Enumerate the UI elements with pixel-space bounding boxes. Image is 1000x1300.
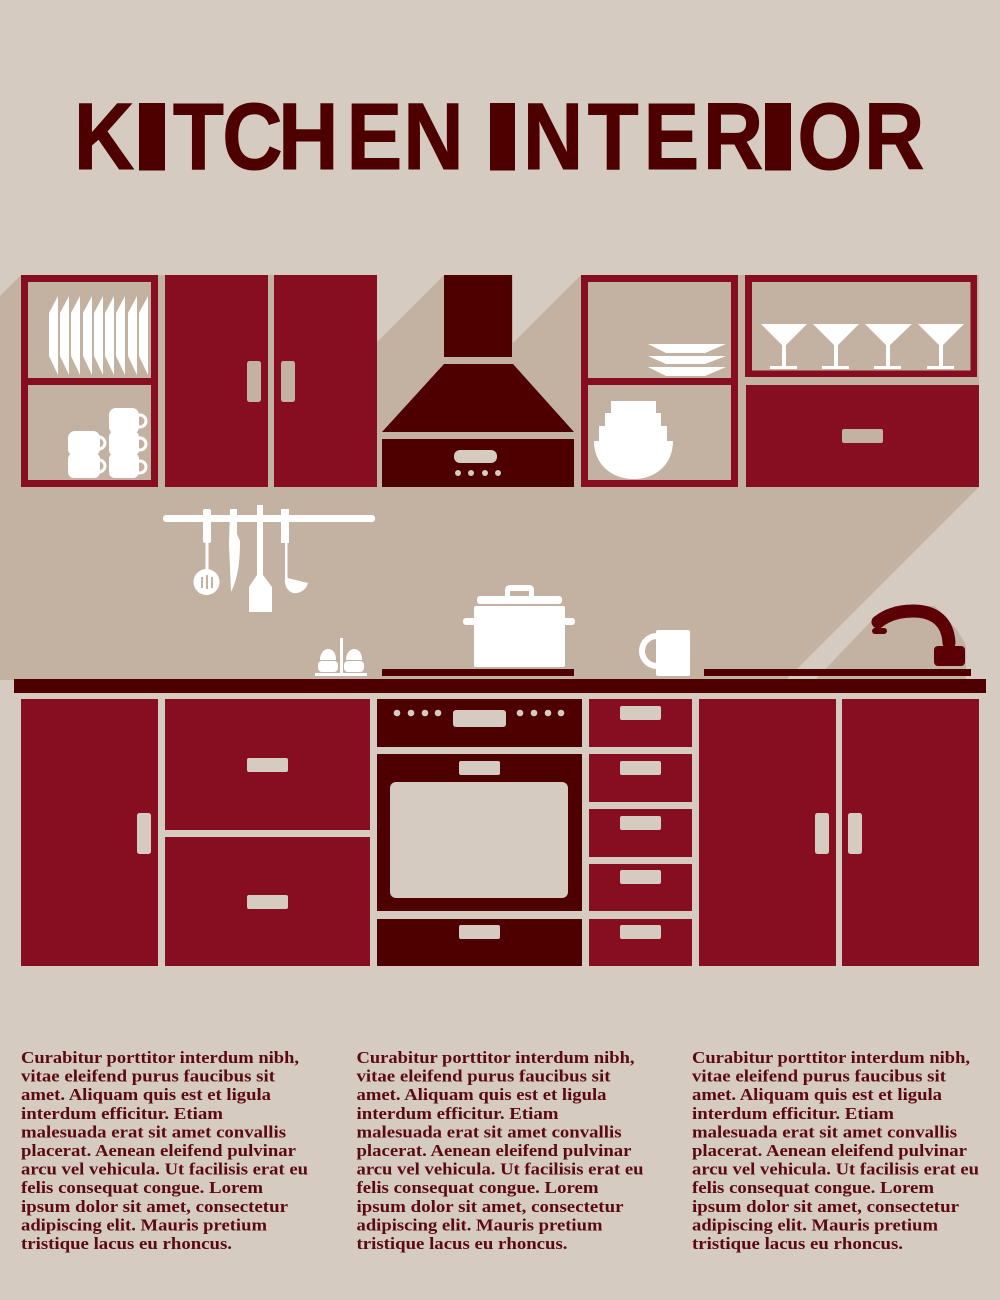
text block: middle column: placerat. Aenean eleifend pulvinar: [356, 1141, 632, 1160]
oven door: [377, 754, 582, 911]
long diagonal wall shadow: [0, 275, 979, 680]
text block: middle column: [356, 1048, 644, 1253]
text block: right column: amet. Aliquam quis est et ligula: [692, 1085, 943, 1104]
text block: middle column: adipiscing elit. Mauris pretium: [356, 1215, 602, 1234]
text block: right column: malesuada erat sit amet convallis: [692, 1122, 957, 1141]
text block: left column: amet. Aliquam quis est et ligula: [21, 1085, 272, 1104]
countertop: [14, 679, 986, 693]
text block: right column: tristique lacus eu rhoncus.: [692, 1234, 903, 1253]
text block: middle column: malesuada erat sit amet convallis: [356, 1122, 622, 1141]
cabinet: double doors: [165, 275, 377, 487]
title: KITCHENINTERIOR: [74, 83, 924, 189]
text block: left column: arcu vel vehicula. Ut facilisis erat eu: [21, 1160, 308, 1179]
icon: upright plates: [49, 296, 148, 375]
icon: stacked cups: [68, 408, 146, 478]
sink: [704, 669, 971, 676]
text block: right column: ipsum dolor sit amet, consectetur: [692, 1197, 959, 1216]
icon: skimmer: [194, 509, 220, 595]
oven bottom drawer: [377, 919, 582, 966]
icon: knife: [229, 509, 240, 592]
text block: left column: ipsum dolor sit amet, consectetur: [21, 1197, 288, 1216]
utensil rail: [163, 505, 375, 612]
text block: right column: arcu vel vehicula. Ut facilisis erat eu: [692, 1160, 979, 1179]
icon: cocktail glasses: [761, 324, 964, 369]
text block: right column: [692, 1048, 979, 1253]
text block: left column: [21, 1048, 308, 1253]
cabinet: five small drawers: [589, 699, 692, 966]
text block: right column: Curabitur porttitor interdum nibh,: [692, 1048, 970, 1067]
icon: cooking pot: [463, 585, 575, 667]
cabinet: two large drawers: [165, 699, 370, 966]
text block: right column: felis consequat congue. Lorem: [692, 1178, 934, 1197]
text block: right column: interdum efficitur. Etiam: [692, 1104, 894, 1123]
text block: left column: placerat. Aenean eleifend pulvinar: [21, 1141, 296, 1160]
text block: middle column: amet. Aliquam quis est et ligula: [356, 1085, 607, 1104]
cabinet: lift-up drawer: [746, 385, 979, 487]
cabinet: plates and cups shelf: [21, 275, 158, 487]
panel: upper cabinets: [21, 275, 979, 487]
cabinet: glasses shelf: [745, 275, 977, 377]
cabinet: single door: [21, 699, 158, 966]
cabinet: double doors under sink: [699, 699, 979, 966]
text block: left column: malesuada erat sit amet convallis: [21, 1122, 286, 1141]
text block: middle column: tristique lacus eu rhoncus.: [356, 1234, 568, 1253]
range hood: [382, 275, 574, 487]
icon: stacked plates: [648, 344, 726, 376]
left hob: [382, 669, 574, 676]
text block: middle column: ipsum dolor sit amet, consectetur: [356, 1197, 624, 1216]
icon: mug: [642, 630, 690, 676]
oven: [377, 699, 582, 966]
icon: faucet: [872, 611, 965, 666]
icon: ladle: [281, 509, 308, 593]
text block: right column: placerat. Aenean eleifend pulvinar: [692, 1141, 967, 1160]
text block: left column: Curabitur porttitor interdum nibh,: [21, 1048, 299, 1067]
cabinet: plates and bowls shelf: [581, 275, 738, 487]
oven control panel: [377, 699, 582, 747]
text block: left column: adipiscing elit. Mauris pretium: [21, 1215, 267, 1234]
icon: salt and pepper shakers: [315, 638, 367, 676]
text block: middle column: arcu vel vehicula. Ut facilisis erat eu: [356, 1160, 644, 1179]
panel: lower cabinets: [21, 699, 979, 966]
text block: left column: tristique lacus eu rhoncus.: [21, 1234, 232, 1253]
text block: left column: vitae eleifend purus faucibus sit: [21, 1067, 275, 1086]
text block: middle column: Curabitur porttitor interdum nibh,: [356, 1048, 634, 1067]
text block: left column: felis consequat congue. Lorem: [21, 1178, 263, 1197]
text block: middle column: interdum efficitur. Etiam: [356, 1104, 558, 1123]
text block: right column: adipiscing elit. Mauris pretium: [692, 1215, 938, 1234]
icon: spatula: [249, 505, 272, 612]
text block: middle column: felis consequat congue. Lorem: [356, 1178, 598, 1197]
text block: right column: vitae eleifend purus faucibus sit: [692, 1067, 946, 1086]
text block: left column: interdum efficitur. Etiam: [21, 1104, 223, 1123]
icon: stacked bowls: [594, 401, 673, 479]
text block: middle column: vitae eleifend purus faucibus sit: [356, 1067, 611, 1086]
